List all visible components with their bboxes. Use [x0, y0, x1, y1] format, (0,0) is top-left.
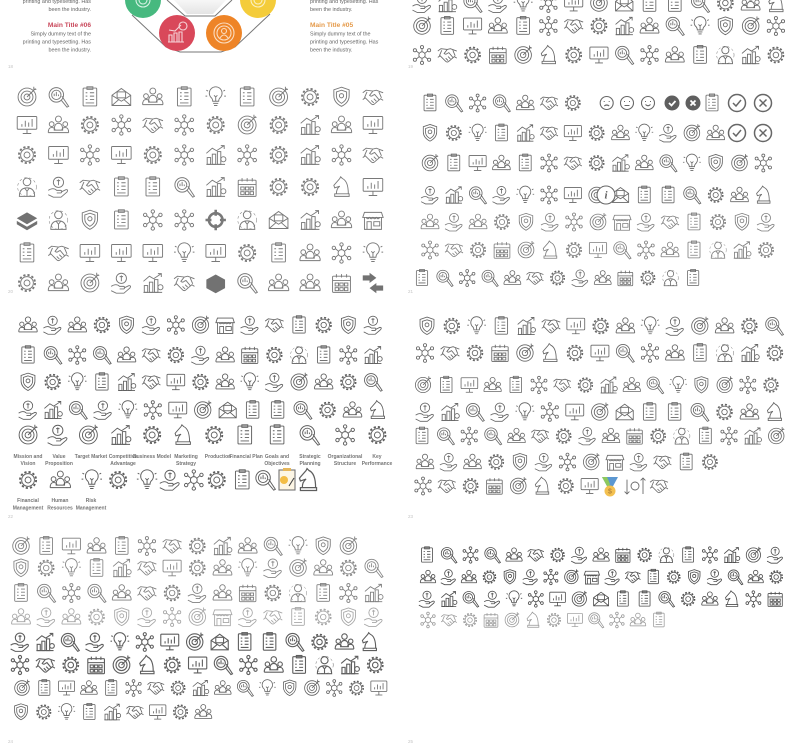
filled cross icon: [686, 96, 700, 110]
left text block: been the industry.: [49, 48, 91, 54]
happy face icon: [642, 96, 654, 110]
captions row 1: Advantage: [110, 461, 136, 467]
captions row 1: Marketing: [174, 454, 198, 460]
page numbers: 21: [408, 289, 414, 294]
coloured medal icon: $: [608, 488, 612, 496]
captions row 1: [14, 454, 392, 467]
captions row 2: Human: [52, 498, 68, 504]
page numbers: 18: [8, 64, 14, 69]
panel: slide 21 icon rows: [416, 94, 800, 286]
page numbers: 24: [8, 739, 14, 744]
captions row 1: Planning: [299, 461, 321, 467]
cross circle icon: [754, 94, 772, 112]
info icon: [597, 186, 615, 204]
right text block: Main Title #05: [310, 22, 353, 29]
right text block: Simply dummy text of the: [310, 32, 371, 38]
left text block: Main Title #06: [48, 22, 91, 29]
page numbers: 19: [408, 64, 414, 69]
page numbers: 23: [408, 514, 414, 519]
captions row 1: Strategic: [299, 454, 321, 460]
coloured strategy bulb icon: [279, 468, 295, 490]
panel: slide 18 hexagon diagram: [23, 0, 379, 54]
cross circle icon 2: [754, 124, 772, 142]
captioned icons row 1: [14, 425, 392, 467]
captions row 1: Business Model: [133, 454, 172, 460]
captions row 1: Financial Plan: [229, 454, 263, 460]
panel: slide 22 icon rows: [13, 316, 461, 512]
captions row 1: Target Market: [75, 454, 108, 460]
handshake document icon: [650, 480, 668, 493]
captioned icons row 2: [13, 470, 275, 512]
left text block: been the industry.: [49, 7, 91, 13]
trend arrows icon: [625, 478, 645, 494]
hexagon centre: [174, 0, 226, 14]
right text block: [310, 0, 379, 54]
captions row 1: Production: [205, 454, 231, 460]
coloured medal icon: [602, 477, 618, 496]
captions row 1: Performance: [362, 461, 392, 467]
captions row 2: Resources: [47, 506, 73, 512]
orange step circle with person icon: [206, 15, 242, 51]
captions row 1: Vision: [21, 461, 35, 467]
captions row 2: [13, 498, 107, 512]
captions row 2: Financial: [17, 498, 39, 504]
page numbers: 22: [8, 514, 14, 519]
right text block: printing and typesetting. Has: [310, 40, 379, 46]
right text block: been the industry.: [310, 7, 352, 13]
knight strategy icon: [299, 469, 317, 490]
yellow step circle: [240, 0, 276, 18]
captions row 1: Mission and: [14, 454, 42, 460]
panel: slide 25 icon rows: [419, 547, 800, 628]
check circle icon: [728, 94, 746, 112]
hexagon connector outline: [132, 0, 270, 52]
neutral face icon: [620, 96, 634, 110]
red step circle with chart icon: [159, 15, 195, 51]
captions row 2: Risk: [86, 498, 96, 504]
filled check icon: [664, 96, 680, 110]
captions row 1: Strategy: [176, 461, 196, 467]
captions row 1: Proposition: [45, 461, 73, 467]
captions row 1: Organizational: [328, 454, 363, 460]
right text block: been the industry.: [310, 48, 352, 54]
captions row 1: Goals and: [265, 454, 289, 460]
page numbers: [8, 64, 414, 744]
check circle icon 2: [728, 124, 746, 142]
captions row 2: Management: [76, 506, 107, 512]
captions row 1: Competitive: [109, 454, 138, 460]
panel: slide 19 icon rows: [413, 0, 800, 64]
left text block: printing and typesetting. Has: [23, 40, 91, 46]
panel: slide 23 icon rows: [415, 317, 800, 496]
captions row 1: Structure: [334, 461, 356, 467]
captions row 1: Objectives: [264, 461, 290, 467]
green step circle: [125, 0, 161, 18]
captions row 2: Management: [13, 506, 44, 512]
page numbers: 20: [8, 289, 14, 294]
left text block: [23, 0, 91, 54]
page numbers: 25: [408, 739, 414, 744]
sad face icon: [600, 96, 613, 110]
captions row 1: Value: [52, 454, 66, 460]
clipboard icon: [706, 94, 718, 111]
panel: slide 24 icon rows: [11, 537, 460, 721]
captions row 1: Key: [372, 454, 382, 460]
panel: slide 20 icon grid: [17, 87, 383, 293]
info icon: i: [604, 190, 608, 202]
left text block: Simply dummy text of the: [30, 32, 91, 38]
